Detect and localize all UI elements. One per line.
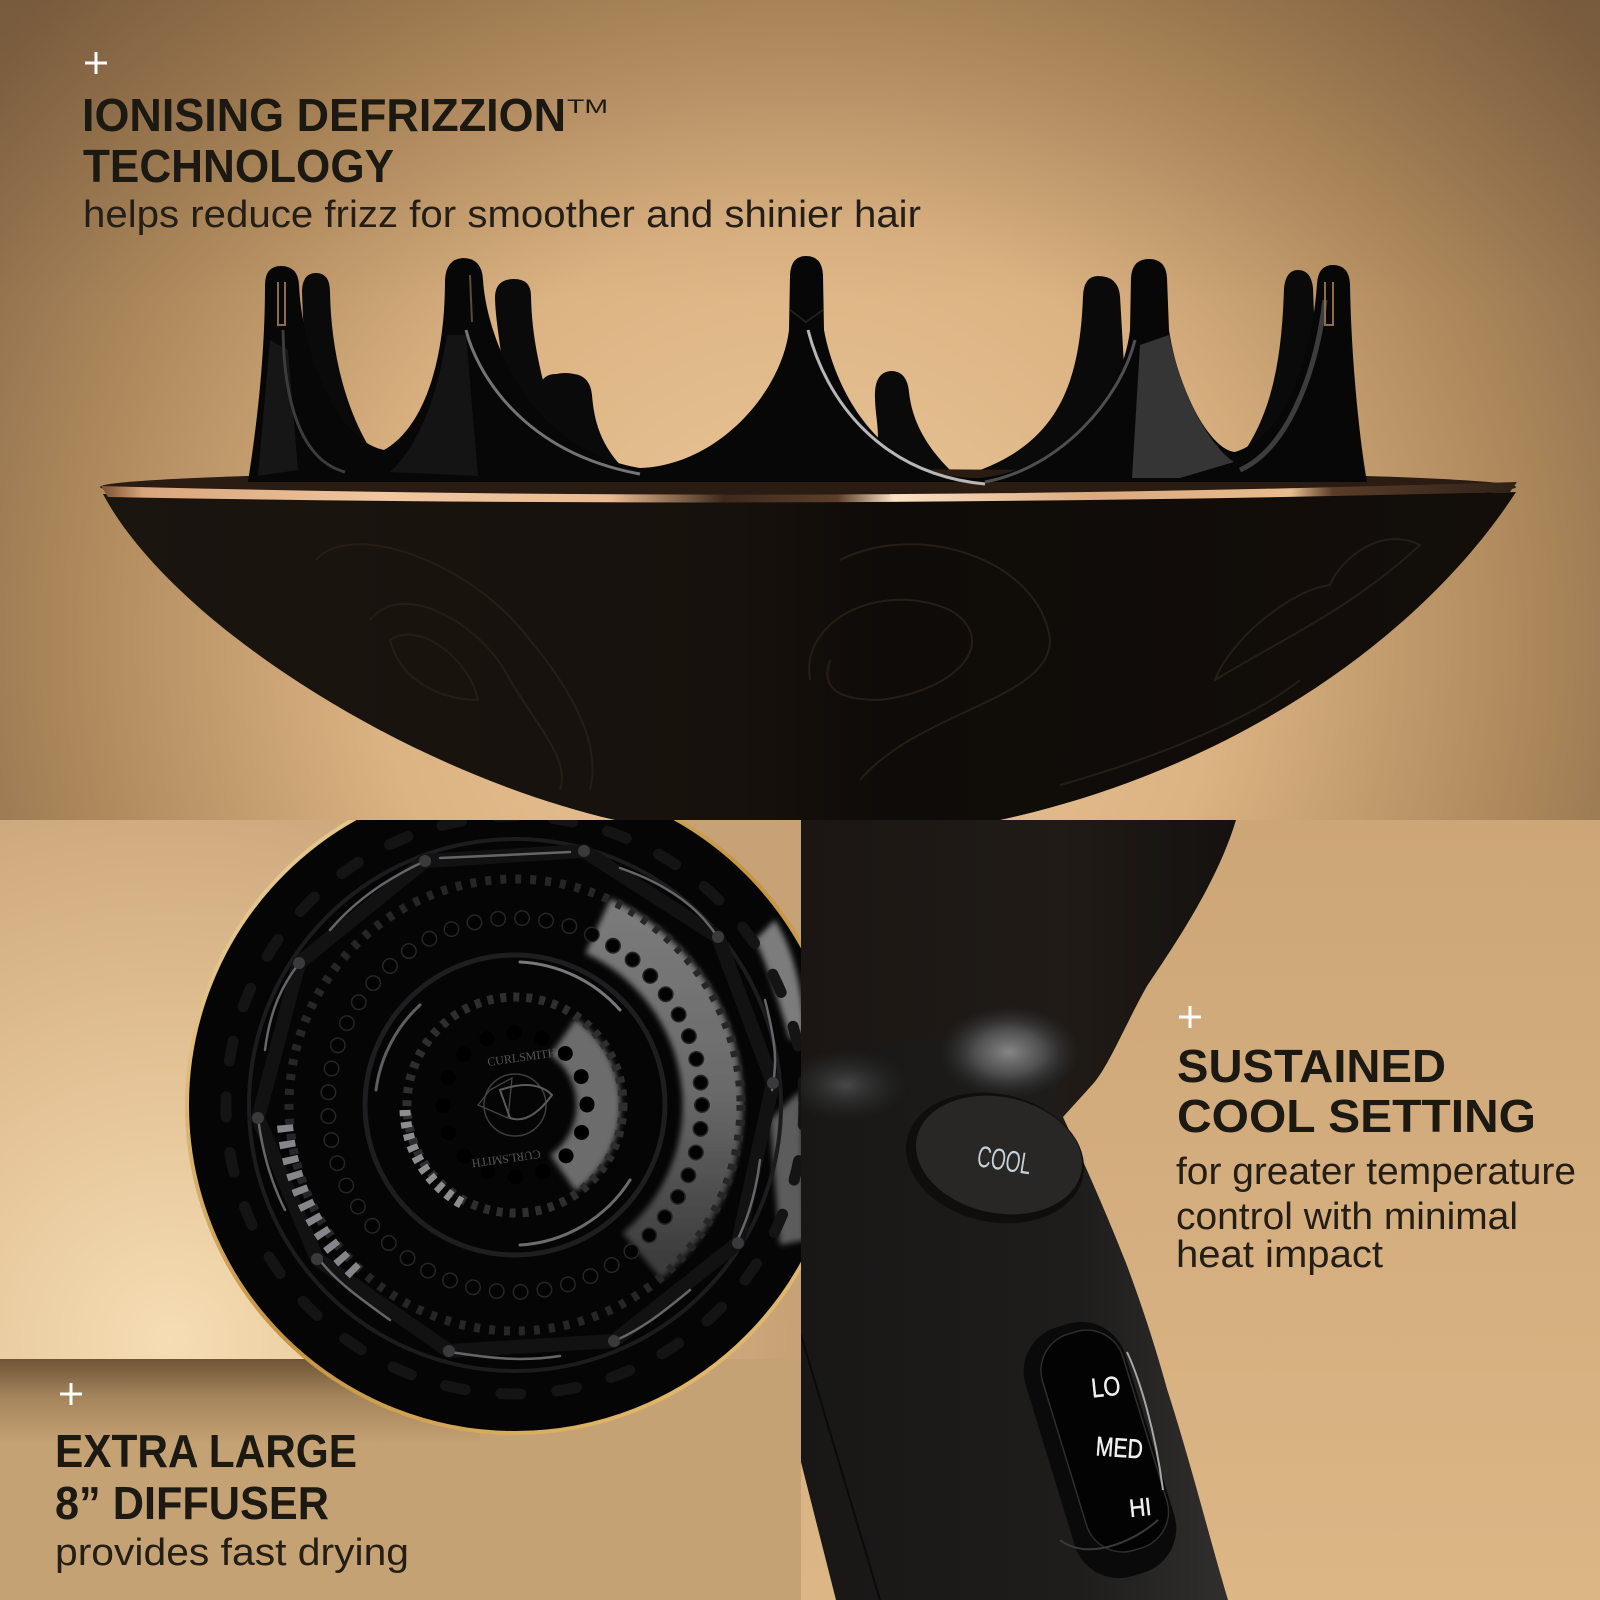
- hair dryer: [784, 820, 1236, 1600]
- wall background: [0, 838, 304, 1359]
- description: temperature control: [1176, 1151, 1576, 1276]
- middle hole ring: [328, 918, 702, 1292]
- panel: ionising technology (top): [0, 0, 1600, 820]
- diffuser disc: [185, 820, 801, 1435]
- reflected crescent: [598, 926, 713, 1256]
- inner tube highlights: [376, 962, 630, 1245]
- prong tips: [252, 845, 779, 1357]
- rim top surface: [100, 469, 1516, 495]
- inner bright serrated segment: [405, 1110, 465, 1205]
- outer serrated ring: [289, 879, 741, 1331]
- description: fast drying: provides fast drying: [55, 1532, 409, 1574]
- diffuser front view: [185, 820, 801, 1435]
- inner reflected crescent: [563, 1037, 598, 1173]
- heading: ionising defrizzion technology: TECHNOLOGY: [83, 140, 394, 192]
- speed switch: MED: [1095, 1431, 1144, 1465]
- plus mark: [85, 52, 107, 74]
- heading: ionising defrizzion technology: TM: [567, 97, 608, 118]
- panel: sustained cool setting (bottom right): [784, 820, 1600, 1600]
- heading: ionising defrizzion technology: [84, 98, 606, 182]
- cool button: [894, 1077, 1096, 1239]
- speed switch: HI: [1128, 1493, 1153, 1523]
- description: temperature control: control with minimal: [1176, 1196, 1518, 1238]
- outer slots: [226, 816, 804, 1394]
- heading: extra large diffuser: 8” DIFFUSER: [55, 1477, 329, 1529]
- handle seam: [801, 1335, 880, 1600]
- prong tube polygon: [258, 851, 775, 1359]
- centre logo: CURLSMITH: [471, 1147, 542, 1171]
- gold rim band: [101, 482, 1517, 502]
- floor: [725, 1359, 730, 1360]
- heading: sustained cool setting: [1177, 1040, 1536, 1142]
- bright serrated segment: [285, 1125, 360, 1277]
- description: temperature control: heat impact: [1176, 1234, 1383, 1276]
- centre logo: [471, 1045, 557, 1171]
- middle hole ring outline: [328, 918, 702, 1292]
- cool button: COOL: [975, 1140, 1033, 1181]
- right panel background: [801, 820, 1600, 1600]
- heading: sustained cool setting: COOL SETTING: [1177, 1090, 1536, 1142]
- top panel background: [0, 0, 1600, 820]
- dryer handle: [801, 1036, 1228, 1600]
- inner hole ring: [558, 1046, 594, 1164]
- description: frizz: helps reduce frizz for smoother and shinier hair: [83, 194, 921, 236]
- neck highlights: [939, 1006, 1079, 1098]
- speed switch: [1012, 1310, 1188, 1590]
- plus mark: [60, 1383, 82, 1405]
- back prongs: [300, 270, 1320, 480]
- swirl embossing: [316, 539, 1420, 790]
- bowl: [103, 492, 1516, 820]
- description: temperature control: for greater temperature: [1176, 1151, 1576, 1193]
- speed switch: LO: [1090, 1371, 1122, 1403]
- heading: extra large diffuser: EXTRA LARGE: [55, 1425, 357, 1477]
- inner dish: [365, 955, 665, 1255]
- heading: extra large diffuser: [56, 1434, 356, 1520]
- outer smooth ring: [249, 839, 781, 1371]
- panel: extra large diffuser (bottom left): [0, 820, 801, 1573]
- plus mark: [1179, 1006, 1201, 1028]
- heading: sustained cool setting: SUSTAINED: [1177, 1040, 1446, 1092]
- floor shadow: [0, 1359, 470, 1432]
- diffuser side view: [100, 256, 1517, 820]
- dryer cone: [800, 820, 1236, 1117]
- centre logo: CURLSMITH: [486, 1045, 557, 1069]
- prong highlights: [258, 275, 1333, 484]
- heading: ionising defrizzion technology: IONISING DEFRIZZION: [82, 89, 566, 141]
- front crown prongs: [248, 256, 1367, 482]
- outer reflections: [755, 920, 805, 1245]
- inner serrated ring: [407, 997, 623, 1213]
